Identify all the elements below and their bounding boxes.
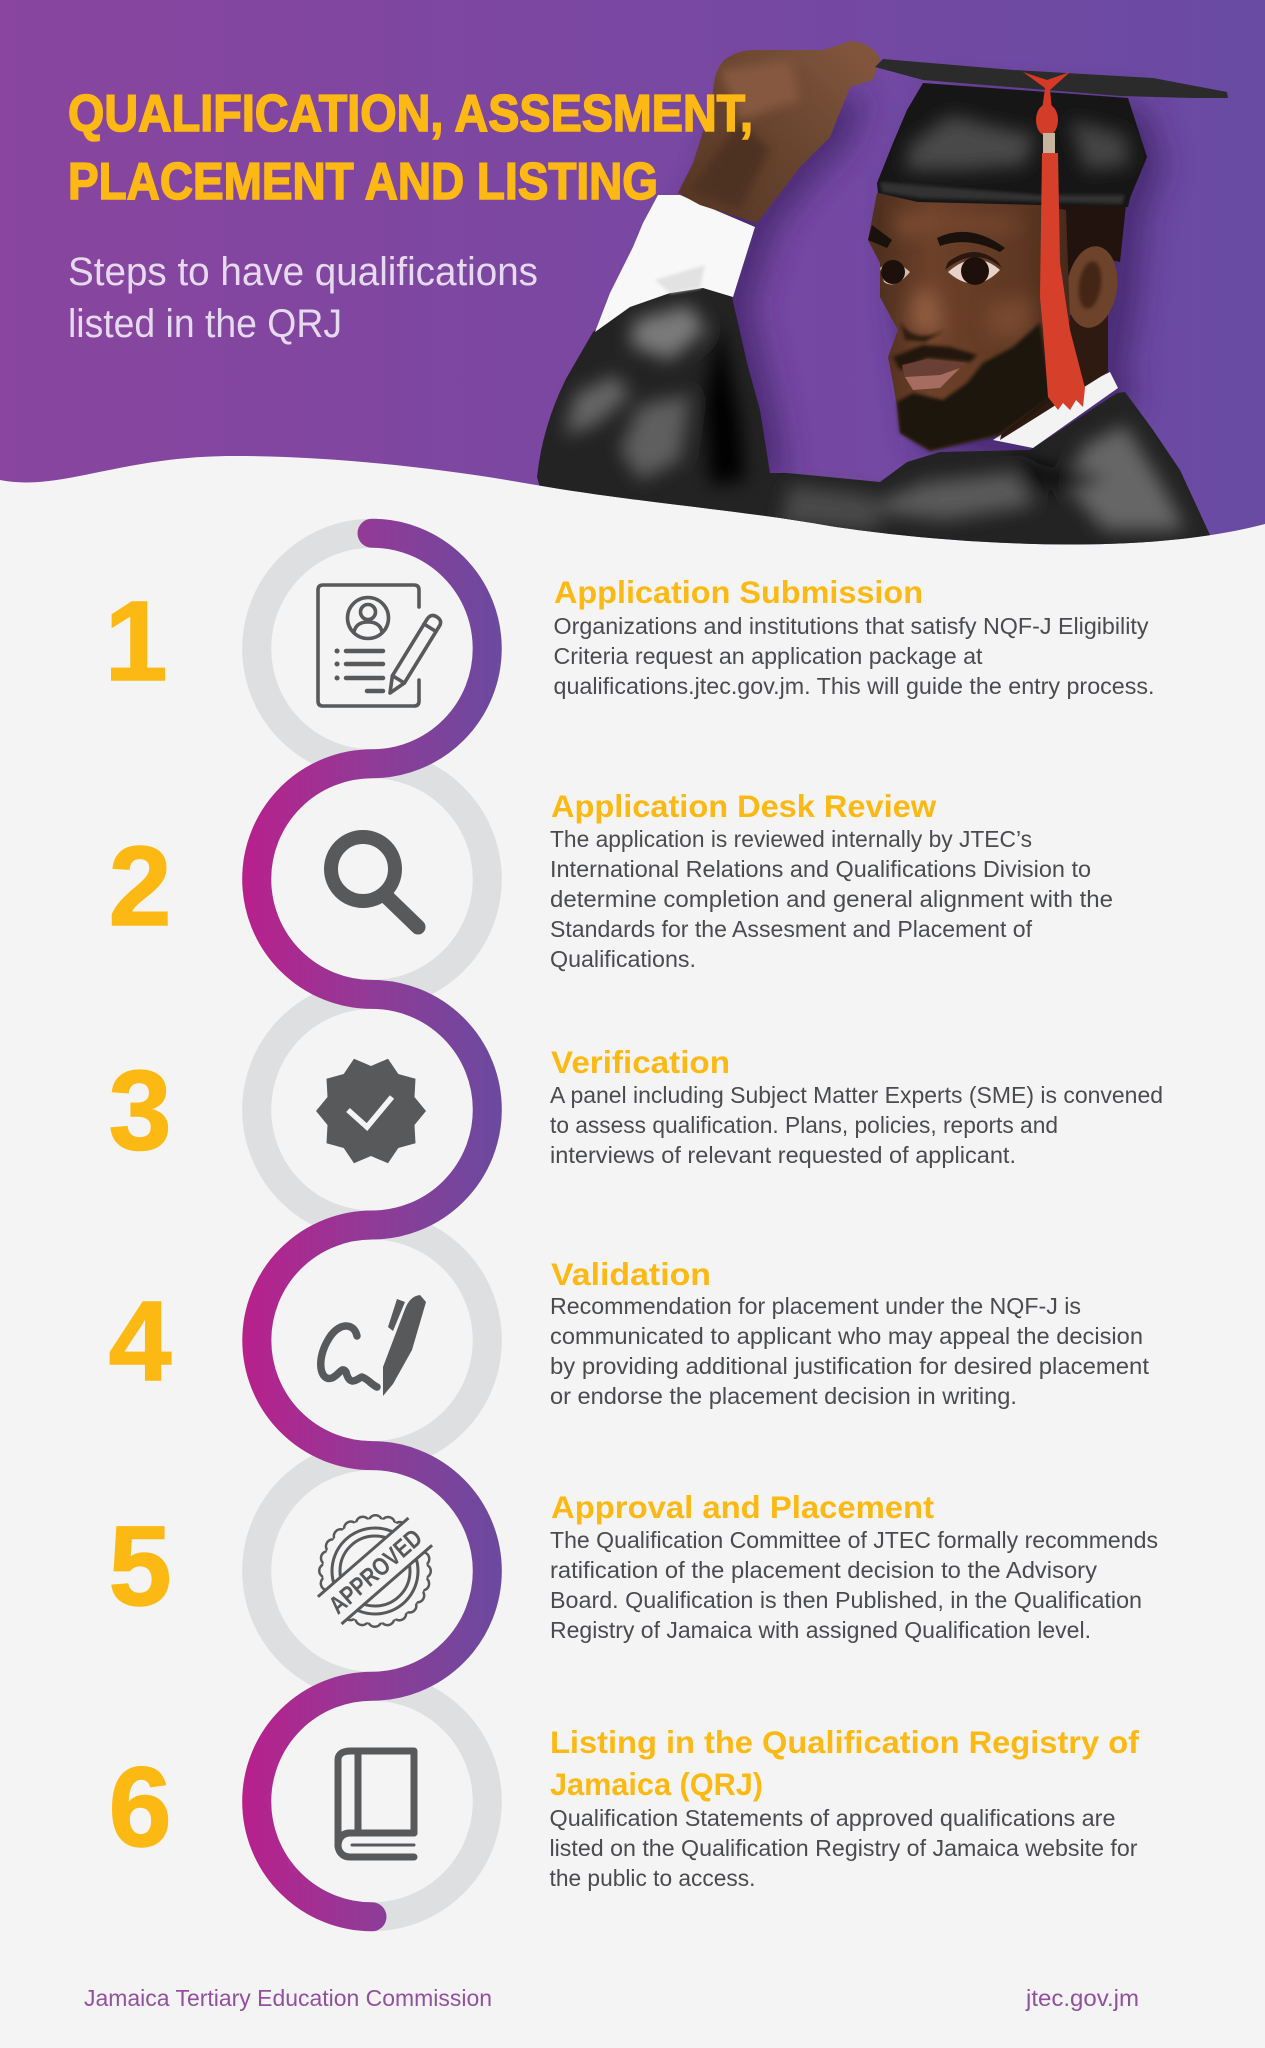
step 3 text: Verification <box>551 1044 730 1080</box>
step numbers <box>105 578 172 1870</box>
step 3 text: interviews of relevant requested of applicant. <box>550 1142 1016 1168</box>
step 4 text <box>550 1256 1149 1409</box>
footer organisation name: Jamaica Tertiary Education Commission <box>84 1985 492 2011</box>
graduate illustration <box>537 41 1228 560</box>
collar <box>993 372 1118 448</box>
step numbers: 5 <box>109 1503 171 1629</box>
step 3 text <box>550 1044 1163 1168</box>
icon: signature and pen <box>321 1295 426 1396</box>
step numbers: 3 <box>109 1047 171 1173</box>
step numbers: 4 <box>109 1278 172 1404</box>
purple wave banner <box>0 0 1265 544</box>
step 2 text: The application is reviewed internally by JTEC’s <box>550 826 1032 852</box>
ear <box>1068 246 1118 328</box>
beard <box>897 323 1052 451</box>
subtitle: listed in the QRJ <box>68 302 342 346</box>
step 1 text: Organizations and institutions that satisfy NQF-J Eligibility <box>554 613 1149 639</box>
step 1 text <box>554 574 1154 699</box>
step 5 text: Board. Qualification is then Published, in the Qualification <box>550 1587 1142 1613</box>
step 4 text: Validation <box>551 1256 711 1292</box>
step 6 text: Qualification Statements of approved qualifications are <box>550 1805 1116 1831</box>
step 5 text: Registry of Jamaica with assigned Qualification level. <box>550 1617 1091 1643</box>
title: PLACEMENT AND LISTING <box>68 153 658 211</box>
title <box>68 85 753 211</box>
moustache <box>893 345 977 370</box>
shirt cuff <box>595 195 755 332</box>
icon: approved stamp: APPROVED <box>323 1524 428 1620</box>
step 5 text: Approval and Placement <box>551 1489 935 1525</box>
step 1 text: qualifications.jtec.gov.jm. This will guide the entry process. <box>554 673 1154 699</box>
step 2 text: Application Desk Review <box>551 788 937 824</box>
step numbers: 2 <box>109 823 171 949</box>
arm and hand <box>678 41 880 223</box>
neck <box>1000 310 1108 440</box>
step 6 text: the public to access. <box>550 1865 756 1891</box>
serpentine gradient path <box>257 533 487 1917</box>
header panel <box>0 0 1265 560</box>
step 2 text: Standards for the Assesment and Placement of <box>550 916 1032 942</box>
footer website: jtec.gov.jm <box>1025 1985 1139 2011</box>
face <box>868 193 1070 451</box>
step 3 text: A panel including Subject Matter Experts (SME) is convened <box>550 1082 1163 1108</box>
step numbers: 1 <box>105 578 167 704</box>
step 4 text: by providing additional justification for desired placement <box>550 1353 1149 1379</box>
step 2 text: International Relations and Qualifications Division to <box>550 856 1091 882</box>
step 2 text <box>550 788 1113 972</box>
red tassel <box>1023 72 1070 106</box>
step 6 text: listed on the Qualification Registry of Jamaica website for <box>550 1835 1138 1861</box>
mortarboard cap <box>877 83 1147 207</box>
title: QUALIFICATION, ASSESMENT, <box>68 85 753 143</box>
step 4 text: communicated to applicant who may appeal the decision <box>550 1323 1143 1349</box>
step 5 text <box>550 1489 1158 1643</box>
step 2 text: determine completion and general alignment with the <box>550 886 1113 912</box>
icon: verified badge <box>316 1059 426 1163</box>
subtitle <box>68 250 538 346</box>
step 5 text: The Qualification Committee of JTEC formally recommends <box>550 1527 1158 1553</box>
step 6 text: Listing in the Qualification Registry of <box>550 1724 1140 1760</box>
eyes <box>880 266 910 284</box>
subtitle: Steps to have qualifications <box>68 250 538 294</box>
step numbers: 6 <box>109 1744 171 1870</box>
step 1 text: Criteria request an application package at <box>554 643 983 669</box>
icon: book <box>338 1751 414 1857</box>
icon: application document <box>318 585 441 706</box>
step 4 text: Recommendation for placement under the NQF-J is <box>550 1293 1081 1319</box>
gray rings <box>257 533 487 1917</box>
step 3 text: to assess qualification. Plans, policies, reports and <box>550 1112 1058 1138</box>
step 1 text: Application Submission <box>554 574 923 610</box>
step 4 text: or endorse the placement decision in writing. <box>550 1383 1017 1409</box>
lips <box>902 359 967 378</box>
hair <box>1058 205 1126 278</box>
icon: magnifier <box>331 837 418 927</box>
step 2 text: Qualifications. <box>550 946 696 972</box>
step 6 text: Jamaica (QRJ) <box>550 1766 763 1802</box>
step 6 text <box>550 1724 1140 1891</box>
step 5 text: ratification of the placement decision to the Advisory <box>550 1557 1097 1583</box>
